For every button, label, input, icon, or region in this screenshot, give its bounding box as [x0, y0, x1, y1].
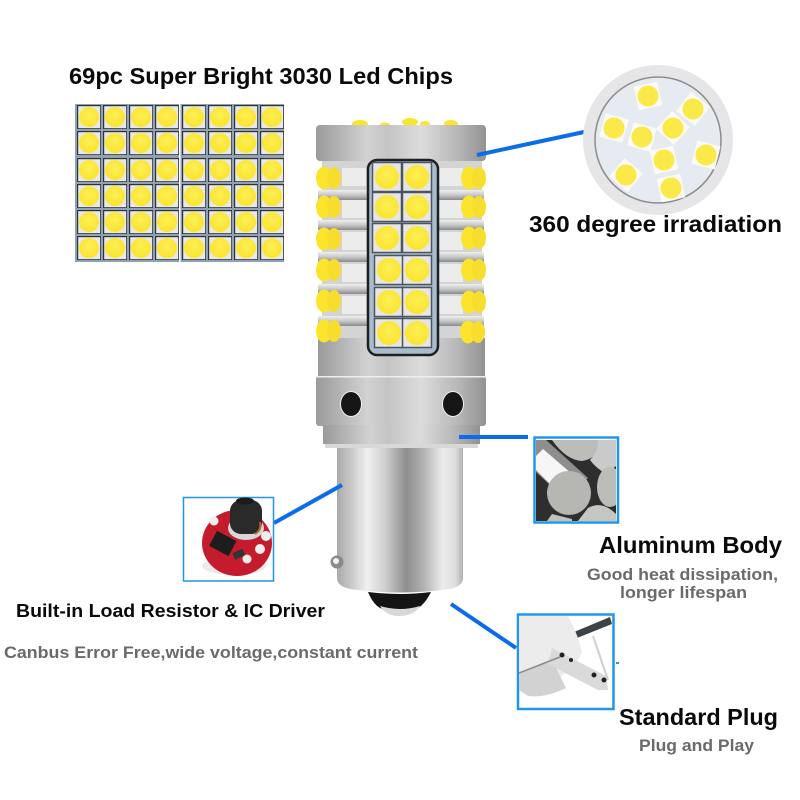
- base contact tip: [368, 592, 431, 616]
- arrow: line to circuit board photo: [274, 485, 342, 523]
- body core with ribs: [318, 155, 484, 350]
- title: chips heading: 69pc Super Bright 3030 Led Chips: [69, 63, 453, 89]
- photo: standard plug: [518, 614, 614, 709]
- heading: 360 degree: 360 degree irradiation: [529, 211, 782, 237]
- panel: LED chip grid: [75, 104, 284, 262]
- text: aluminum description: [587, 565, 778, 602]
- arrow: line to top view: [477, 132, 584, 155]
- photo: aluminum rods: [534, 438, 623, 522]
- text: aluminum body heading: Aluminum Body: [599, 532, 782, 558]
- collar holes: [340, 392, 464, 416]
- arrow: line to plug photo: [451, 604, 516, 648]
- top chips peeking above cap: [352, 118, 458, 128]
- illustration: LED bulb: [316, 118, 486, 616]
- side chips right: [460, 166, 486, 344]
- side chips left: [316, 166, 341, 342]
- text: canbus description: Canbus Error Free,wide voltage,constant current: [4, 643, 418, 662]
- centre LED panel: [368, 160, 438, 355]
- lower neck and collar: [316, 338, 486, 448]
- top cap: [316, 125, 486, 161]
- text: aluminum description: Good heat dissipation,: [587, 565, 778, 584]
- tick mark beside plug photo: [616, 662, 619, 664]
- text: standard plug heading: Standard Plug: [619, 704, 778, 730]
- text: aluminum description: longer lifespan: [620, 583, 747, 602]
- icon: bulb top view: [583, 65, 733, 215]
- text: plug description: Plug and Play: [639, 736, 755, 755]
- metal base: [337, 448, 463, 592]
- base pin: [330, 556, 344, 568]
- photo: circuit board: [184, 498, 274, 581]
- text: load resistor heading: Built-in Load Resistor & IC Driver: [16, 601, 325, 621]
- arrow: line to aluminum photo: [459, 435, 528, 439]
